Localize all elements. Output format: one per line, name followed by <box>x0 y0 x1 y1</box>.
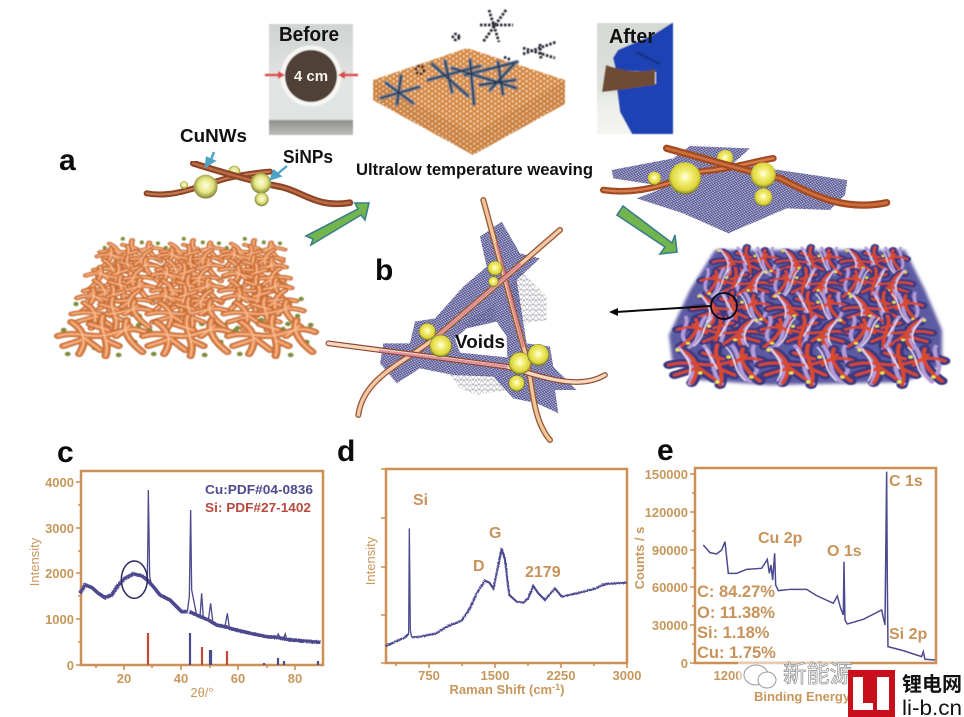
y axis numbers: 1000 <box>45 612 74 627</box>
label: a: a <box>59 144 76 177</box>
label: CuNWs: CuNWs <box>180 126 247 146</box>
label: c: c <box>57 436 74 469</box>
peak labels: Si 2p <box>889 626 927 643</box>
peak labels <box>413 492 561 581</box>
y axis numbers: 30000 <box>652 618 688 633</box>
y axis numbers: 2000 <box>45 566 74 581</box>
woven junction detail <box>328 200 605 440</box>
atomic percentages: C: 84.27% <box>697 583 775 601</box>
peak labels: Si <box>413 492 428 509</box>
reference bars <box>148 633 318 665</box>
x axis numbers <box>117 671 302 686</box>
woven composite block <box>669 247 945 385</box>
void opening <box>455 322 507 357</box>
watermark: site name: 锂电网 <box>902 668 962 697</box>
y title: Counts / s <box>632 527 647 589</box>
graphene mesh <box>380 222 577 413</box>
chart e: XPS <box>632 467 936 704</box>
label: e: e <box>657 434 674 467</box>
peak labels: G <box>489 525 501 542</box>
chart d: Raman <box>363 469 641 697</box>
y axis numbers: 150000 <box>645 467 688 482</box>
x axis numbers <box>418 668 641 683</box>
label: b: b <box>375 254 393 287</box>
central lattice illustration <box>373 10 565 155</box>
fibers <box>328 200 605 440</box>
Raman curve <box>386 528 627 646</box>
photo: before: Before <box>279 24 339 46</box>
x title: 2θ/° <box>190 685 214 700</box>
XRD curve <box>80 490 321 642</box>
peak labels <box>758 473 927 643</box>
y axis numbers <box>45 475 74 673</box>
peak labels: Cu 2p <box>758 530 803 547</box>
nanowire and silicon particles (left) <box>147 163 350 206</box>
y title: Intensity <box>363 536 378 585</box>
x axis numbers: 60 <box>231 671 245 686</box>
x title: Raman Shift (cm <box>450 682 552 697</box>
y title: Intensity <box>27 537 42 586</box>
atomic percentages <box>697 583 776 662</box>
green arrow: to weaving <box>306 203 369 245</box>
atomic percentages: O: 11.38% <box>697 604 775 622</box>
x title: ) <box>560 682 564 697</box>
peak labels: D <box>473 558 485 575</box>
x title: -1 <box>552 682 560 692</box>
watermark: wechat source <box>738 661 853 692</box>
x axis numbers: 80 <box>288 671 302 686</box>
x axis numbers: 1200 <box>714 668 742 683</box>
peak labels: O 1s <box>827 543 862 560</box>
legend <box>205 482 313 515</box>
photo: before <box>265 24 358 135</box>
graphene stars on lattice <box>381 60 517 104</box>
legend: Cu:PDF#04-0836 <box>205 482 313 497</box>
y axis numbers: 90000 <box>652 543 688 558</box>
watermark: site name <box>895 668 964 717</box>
y axis numbers: 120000 <box>645 505 688 520</box>
green arrow: to woven block <box>617 206 677 254</box>
legend: Si: PDF#27-1402 <box>205 500 311 515</box>
peak labels: 2179 <box>525 564 561 581</box>
label: title weaving: Ultralow temperature weaving <box>356 160 593 179</box>
watermark: wechat source: 新能源 <box>783 661 853 688</box>
floating graphene flakes <box>416 10 556 74</box>
chart c: XRD <box>27 471 323 700</box>
y axis numbers: 0 <box>681 656 688 671</box>
x axis numbers: 3000 <box>613 668 641 683</box>
lattice slab <box>373 48 565 155</box>
mesh sheets <box>612 146 847 233</box>
label: SiNPs: SiNPs <box>283 147 333 167</box>
x axis numbers: 40 <box>174 671 188 686</box>
watermark: red logo <box>848 670 895 717</box>
x title: Binding Energy (eV) <box>754 689 878 704</box>
photo: after: After <box>609 26 655 48</box>
XPS curve <box>703 472 935 660</box>
CuNW and SiNP network block <box>58 237 315 357</box>
y axis numbers: 60000 <box>652 580 688 595</box>
y axis numbers: 3000 <box>45 521 74 536</box>
photo: after <box>597 23 673 134</box>
graphene-wrapped nanowire (right) <box>603 146 887 233</box>
x axis numbers: 1500 <box>481 668 509 683</box>
x axis numbers: 2250 <box>547 668 575 683</box>
x axis numbers: 750 <box>418 668 440 683</box>
x axis numbers: 20 <box>117 671 131 686</box>
photo: before: 4 cm <box>294 68 328 85</box>
pointer arrows <box>206 152 287 179</box>
silicon spheres <box>419 261 549 391</box>
peak labels: C 1s <box>889 473 923 490</box>
atomic percentages: Cu: 1.75% <box>697 644 776 662</box>
icon: chat bubbles <box>744 665 776 688</box>
y axis numbers <box>645 467 688 671</box>
label: Voids: Voids <box>455 332 505 352</box>
callout circle and arrow <box>609 293 737 319</box>
atomic percentages: Si: 1.18% <box>697 624 770 642</box>
y axis numbers: 4000 <box>45 475 74 490</box>
y axis numbers: 0 <box>67 658 74 673</box>
label: d: d <box>337 435 355 468</box>
